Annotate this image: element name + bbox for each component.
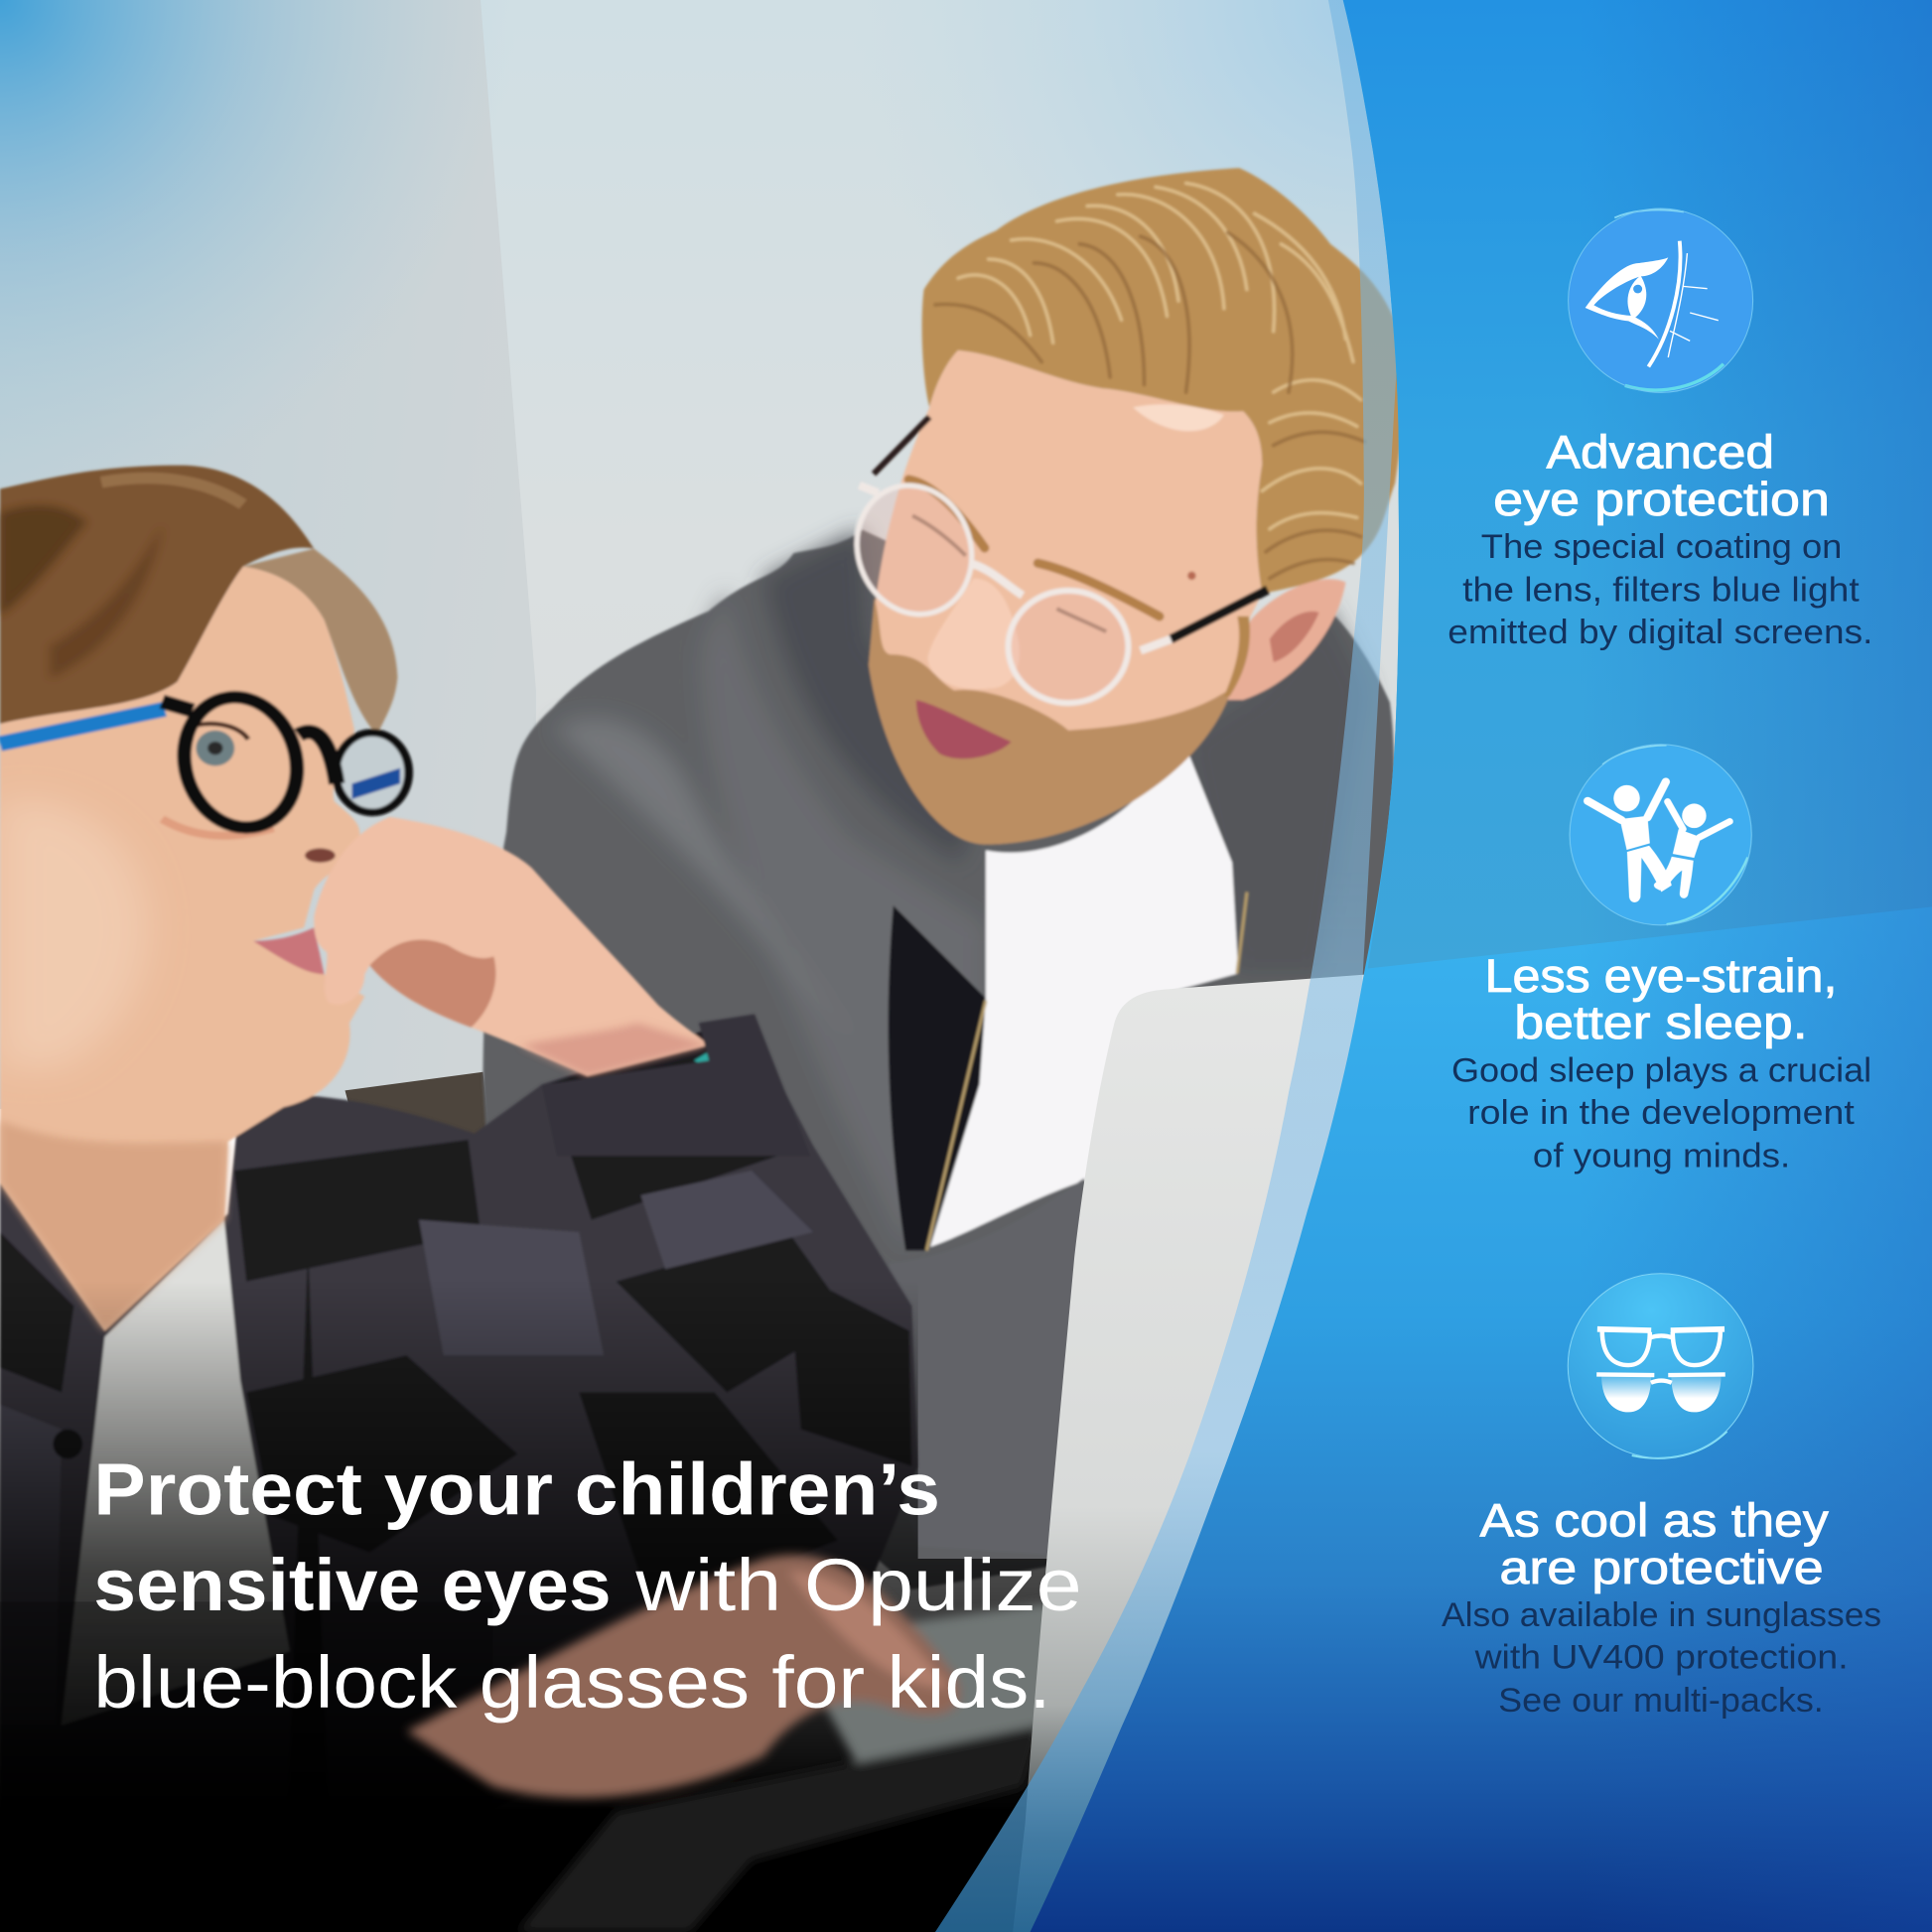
- feature 3 text: See our multi-packs.: [1498, 1682, 1824, 1720]
- translucent curved band: [935, 0, 1417, 1932]
- feature 2 text: Good sleep plays a crucial: [1451, 1052, 1871, 1090]
- blue temple: [0, 709, 165, 744]
- clear frames: [1597, 1329, 1725, 1365]
- hood shading: [554, 530, 1368, 1251]
- feature 2 text: [1451, 949, 1871, 1174]
- feature 1 text: [1448, 426, 1872, 651]
- icon: eye behind lens: [1569, 208, 1753, 392]
- boy head, in local coordinates: [0, 466, 810, 1331]
- feature 3 text: [1442, 1494, 1881, 1720]
- feature 3 text: Also available in sunglasses: [1442, 1596, 1881, 1634]
- headline: with Opulize: [634, 1544, 1082, 1626]
- blue panel background: [1031, 0, 1932, 1932]
- cuff: [542, 1014, 810, 1156]
- sun frames: [1601, 1375, 1722, 1412]
- photo: dark gradient at the bottom: [0, 1282, 1084, 1932]
- photo: laptop lid: [1013, 973, 1380, 1932]
- feature 1 text: Advanced: [1547, 426, 1774, 479]
- feature 3 text: are protective: [1499, 1541, 1824, 1593]
- hair: [243, 549, 397, 735]
- nose: [927, 579, 1020, 689]
- photo background: wall: [0, 0, 1442, 1201]
- feature 1 text: The special coating on: [1481, 528, 1842, 566]
- clear glasses: [839, 417, 1268, 703]
- headline: [93, 1448, 1082, 1724]
- beard: [869, 598, 1232, 844]
- sleeve: [863, 1177, 1084, 1555]
- lens interiors: [336, 733, 409, 812]
- headline: blue-block glasses for kids.: [93, 1641, 1051, 1724]
- photo: father with clear glasses: [483, 168, 1405, 1589]
- feature 3 text: with UV400 protection.: [1473, 1638, 1849, 1676]
- icon: two jumping kids: [1570, 745, 1751, 925]
- feature 1 text: eye protection: [1493, 473, 1830, 525]
- hair: [922, 168, 1405, 594]
- face and neck: [0, 567, 364, 1331]
- black frames: [173, 689, 309, 835]
- feature 1 text: the lens, filters blue light: [1462, 572, 1860, 610]
- feature 3 text: As cool as they: [1480, 1494, 1829, 1547]
- headline: Protect your children’s: [93, 1448, 940, 1530]
- white tee: [62, 1220, 290, 1725]
- feature 2 text: better sleep.: [1514, 996, 1808, 1048]
- hand on nose: [314, 817, 709, 1076]
- hoodie body: [483, 530, 1395, 1589]
- plaid shirt: [0, 1017, 918, 1932]
- feature 2 text: of young minds.: [1533, 1137, 1790, 1174]
- icon: eyeglasses and sunglasses: [1568, 1274, 1753, 1458]
- photo: child with blue glasses: [0, 466, 918, 1932]
- feature 2 text: role in the development: [1467, 1094, 1855, 1132]
- white t-shirt: [930, 740, 1238, 1247]
- headline: sensitive eyes: [93, 1544, 612, 1626]
- photo: laptop keyboard and child's typing hand: [407, 1555, 1059, 1932]
- feature 1 text: emitted by digital screens.: [1448, 614, 1872, 651]
- black inner lining: [889, 905, 986, 1251]
- face: [869, 350, 1345, 844]
- feature 2 text: Less eye-strain,: [1484, 949, 1837, 1002]
